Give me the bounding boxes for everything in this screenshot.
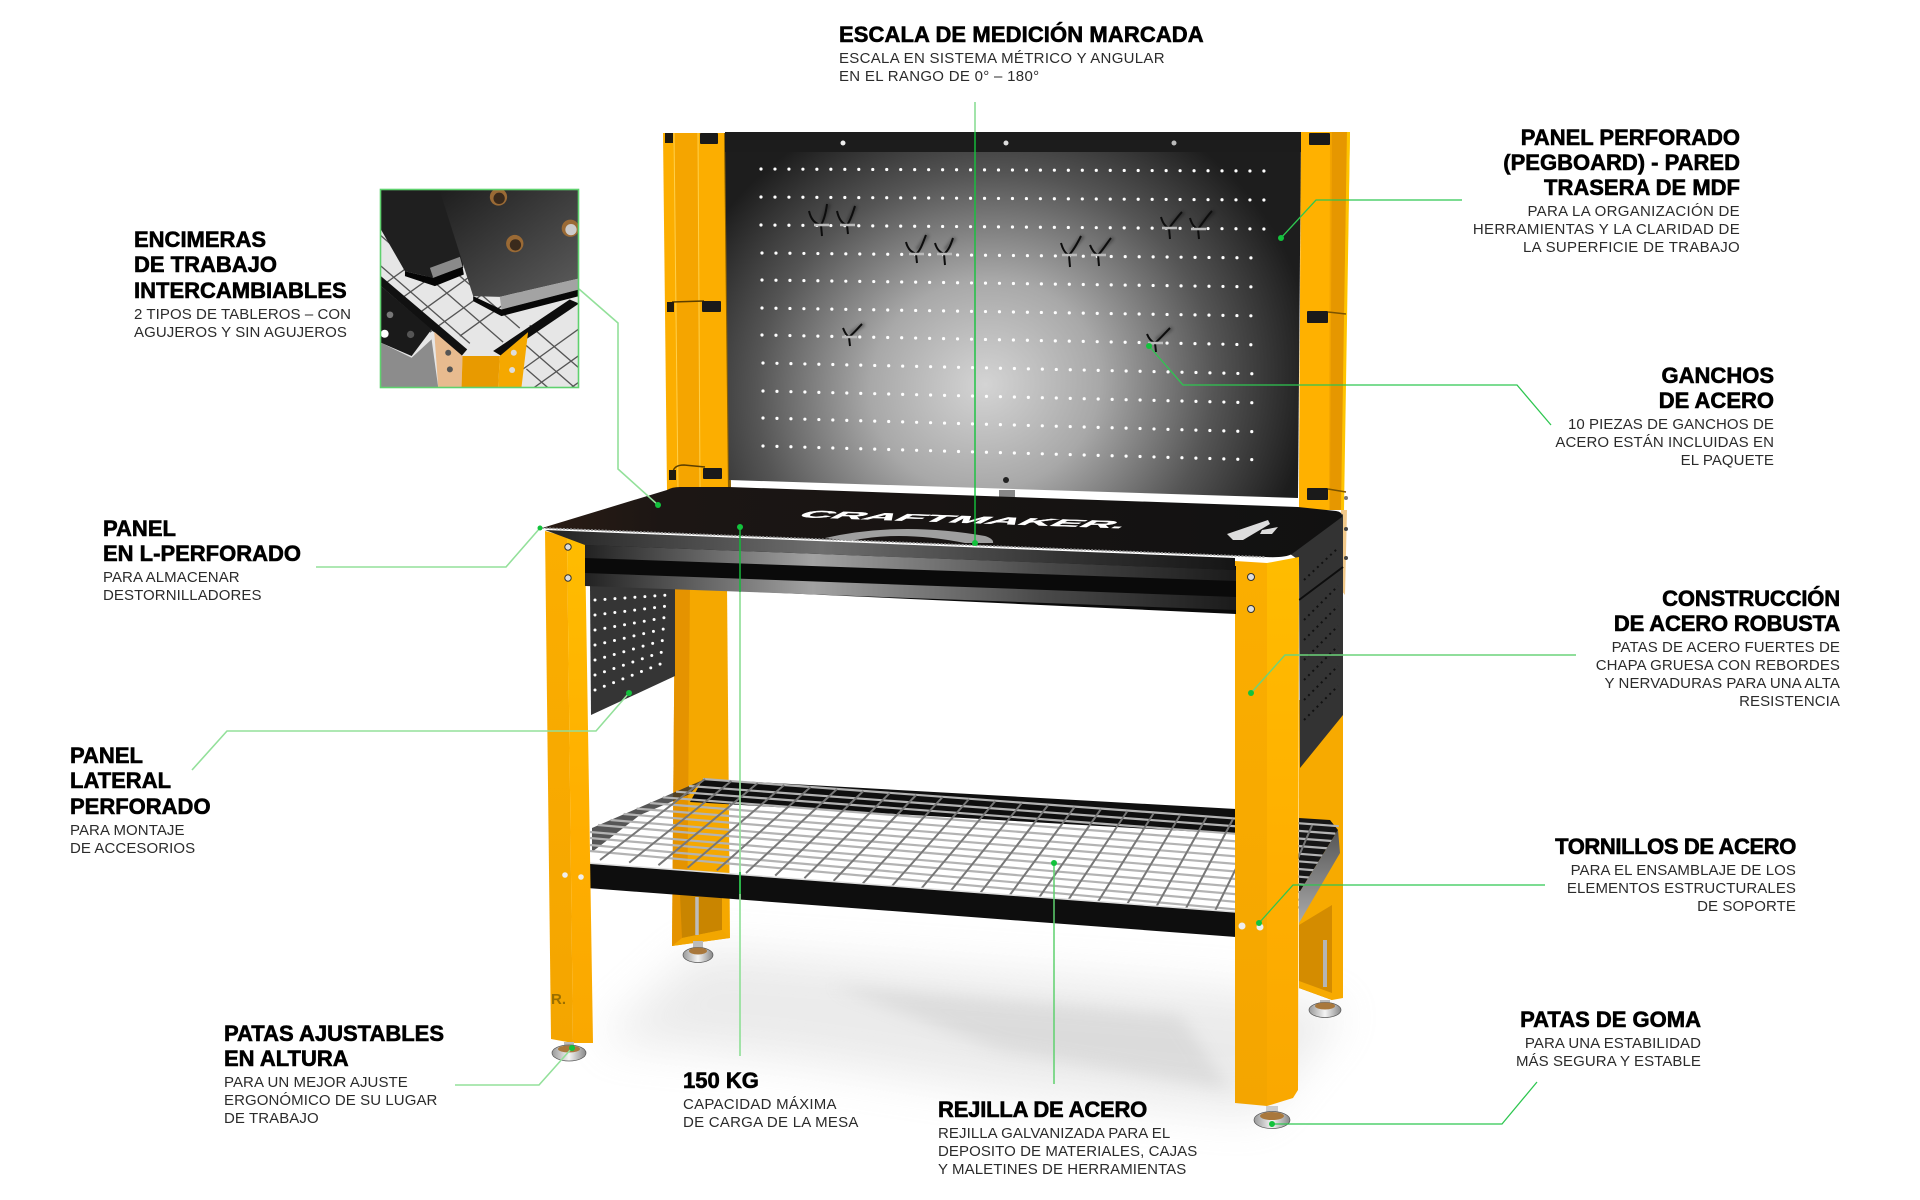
heading: DE ACERO ROBUSTA bbox=[1614, 611, 1840, 636]
description: ESCALA EN SISTEMA MÉTRICO Y ANGULAR bbox=[839, 50, 1165, 66]
description: DE CARGA DE LA MESA bbox=[683, 1114, 859, 1131]
left upright bbox=[663, 133, 731, 490]
leader: worktops bbox=[579, 289, 661, 508]
description: DEPOSITO DE MATERIALES, CAJAS bbox=[938, 1143, 1197, 1160]
text block: worktops bbox=[134, 227, 351, 341]
description bbox=[938, 1124, 1197, 1178]
description: Y NERVADURAS PARA UNA ALTA bbox=[1604, 675, 1840, 692]
text block: steel grid bbox=[938, 1097, 1197, 1178]
description: LA SUPERFICIE DE TRABAJO bbox=[1523, 239, 1740, 256]
inset frame bbox=[380, 190, 578, 388]
description: HERRAMIENTAS Y LA CLARIDAD DE bbox=[1473, 221, 1740, 238]
leader: side panel bbox=[192, 690, 632, 770]
text block: steel screws bbox=[1555, 834, 1796, 915]
description: PARA LA ORGANIZACIÓN DE bbox=[1527, 202, 1740, 220]
description: PARA UN MEJOR AJUSTE bbox=[224, 1074, 408, 1090]
description: PARA MONTAJE bbox=[70, 822, 185, 839]
description bbox=[1567, 862, 1796, 915]
brand name on tabletop: CRAFTMAKER. bbox=[792, 509, 1137, 531]
rear beam seen through the grid bbox=[690, 779, 1236, 834]
longitudinal wires bbox=[590, 779, 1339, 915]
heading: TORNILLOS DE ACERO bbox=[1555, 834, 1796, 859]
leader: L panel bbox=[316, 526, 542, 567]
heading: DE TRABAJO bbox=[134, 252, 277, 277]
description: MÁS SEGURA Y ESTABLE bbox=[1516, 1053, 1701, 1070]
text block: measuring scale bbox=[839, 22, 1204, 85]
text block: load capacity bbox=[683, 1068, 859, 1131]
floor shadow bbox=[600, 950, 1345, 1115]
leader: rubber feet bbox=[1269, 1082, 1537, 1127]
heading: PERFORADO bbox=[70, 794, 211, 819]
heading: PANEL PERFORADO bbox=[1521, 125, 1740, 150]
transverse wires bbox=[600, 779, 1312, 920]
right upright bbox=[1299, 132, 1350, 595]
heading: ENCIMERAS bbox=[134, 227, 266, 252]
description: DE ACCESORIOS bbox=[70, 840, 195, 857]
text block: adjustable feet bbox=[224, 1021, 444, 1127]
leader: measuring scale bbox=[972, 102, 978, 546]
description bbox=[224, 1074, 437, 1127]
description bbox=[70, 822, 195, 857]
leader: pegboard bbox=[1278, 200, 1462, 241]
wire shelf bbox=[587, 779, 1340, 937]
text block: pegboard bbox=[1473, 125, 1740, 256]
heading: EN L-PERFORADO bbox=[103, 541, 301, 566]
description: AGUJEROS Y SIN AGUJEROS bbox=[134, 324, 347, 341]
description: PARA UNA ESTABILIDAD bbox=[1525, 1034, 1701, 1052]
heading: CONSTRUCCIÓN bbox=[1662, 586, 1840, 611]
heading bbox=[1659, 363, 1774, 413]
text block: side panel bbox=[70, 743, 211, 857]
description: 2 TIPOS DE TABLEROS – CON bbox=[134, 306, 351, 323]
heading bbox=[103, 516, 301, 566]
heading: TRASERA DE MDF bbox=[1544, 175, 1740, 200]
logo mark on tabletop bbox=[1227, 520, 1278, 540]
description bbox=[839, 50, 1165, 85]
description: 10 PIEZAS DE GANCHOS DE bbox=[1568, 416, 1774, 432]
leader: load capacity bbox=[737, 524, 743, 1056]
shelf front beam bbox=[587, 863, 1236, 937]
pegboard back wall bbox=[725, 132, 1301, 499]
description: DE TRABAJO bbox=[224, 1110, 319, 1127]
heading: REJILLA DE ACERO bbox=[938, 1097, 1147, 1122]
rear right leg bbox=[1299, 700, 1343, 1018]
description: ERGONÓMICO DE SU LUGAR bbox=[224, 1092, 437, 1109]
protractor scale bbox=[825, 529, 993, 543]
description: EN EL RANGO DE 0° – 180° bbox=[839, 68, 1039, 85]
description: EL PAQUETE bbox=[1681, 452, 1774, 469]
description: REJILLA GALVANIZADA PARA EL bbox=[938, 1124, 1170, 1142]
heading: PATAS DE GOMA bbox=[1520, 1007, 1701, 1032]
description: Y MALETINES DE HERRAMIENTAS bbox=[938, 1161, 1186, 1178]
description: PARA EL ENSAMBLAJE DE LOS bbox=[1571, 862, 1796, 878]
description: PATAS DE ACERO FUERTES DE bbox=[1612, 638, 1840, 656]
heading: GANCHOS bbox=[1662, 363, 1774, 388]
heading bbox=[134, 227, 347, 303]
description: RESISTENCIA bbox=[1739, 693, 1840, 710]
text block: steel hooks bbox=[1555, 363, 1774, 469]
description bbox=[103, 568, 262, 604]
description bbox=[1516, 1034, 1701, 1070]
description: DESTORNILLADORES bbox=[103, 587, 262, 604]
description bbox=[1555, 416, 1774, 469]
leader: hooks bbox=[1146, 343, 1551, 425]
heading: LATERAL bbox=[70, 768, 171, 793]
front right leg bbox=[1235, 557, 1299, 1128]
tabletop bbox=[542, 487, 1342, 570]
panel: right perforated side panel bbox=[1290, 514, 1343, 768]
description: CAPACIDAD MÁXIMA bbox=[683, 1096, 837, 1112]
description: PARA ALMACENAR bbox=[103, 568, 240, 586]
description: DE SOPORTE bbox=[1697, 898, 1796, 915]
description: CHAPA GRUESA CON REBORDES bbox=[1596, 657, 1840, 674]
heading: EN ALTURA bbox=[224, 1046, 349, 1071]
heading bbox=[224, 1021, 444, 1071]
text block: L panel bbox=[103, 516, 301, 604]
leader: steel screws bbox=[1256, 885, 1545, 926]
heading: 150 KG bbox=[683, 1068, 759, 1093]
heading bbox=[1503, 125, 1740, 200]
text block: steel construction bbox=[1596, 586, 1840, 710]
heading: PANEL bbox=[70, 743, 143, 768]
description bbox=[1596, 638, 1840, 710]
steel hooks bbox=[809, 204, 1212, 352]
description bbox=[134, 306, 351, 341]
description: ELEMENTOS ESTRUCTURALES bbox=[1567, 880, 1796, 897]
panel: left perforated side panel bbox=[590, 585, 675, 715]
front left leg bbox=[545, 531, 593, 1061]
heading bbox=[1614, 586, 1840, 636]
heading bbox=[70, 743, 211, 819]
leader: steel grid bbox=[1051, 860, 1057, 1084]
leader: steel construction bbox=[1248, 655, 1576, 696]
shelf side rail bbox=[1299, 830, 1340, 923]
description: ACERO ESTÁN INCLUIDAS EN bbox=[1555, 434, 1774, 451]
rear left leg bbox=[672, 585, 730, 962]
heading: DE ACERO bbox=[1659, 388, 1774, 413]
description bbox=[683, 1096, 859, 1131]
front left leg: R. bbox=[551, 991, 566, 1008]
inset photo: interchangeable worktops bbox=[381, 190, 578, 387]
pegboard perforations bbox=[761, 169, 1264, 460]
heading: INTERCAMBIABLES bbox=[134, 278, 347, 303]
table apron rails bbox=[585, 541, 1236, 614]
description bbox=[1473, 202, 1740, 256]
heading: PATAS AJUSTABLES bbox=[224, 1021, 444, 1046]
leader: adjustable feet bbox=[455, 1045, 575, 1085]
hook shadows bbox=[822, 204, 1214, 340]
heading: ESCALA DE MEDICIÓN MARCADA bbox=[839, 22, 1204, 47]
text block: rubber feet bbox=[1516, 1007, 1701, 1070]
heading: (PEGBOARD) - PARED bbox=[1503, 150, 1740, 175]
heading: PANEL bbox=[103, 516, 176, 541]
